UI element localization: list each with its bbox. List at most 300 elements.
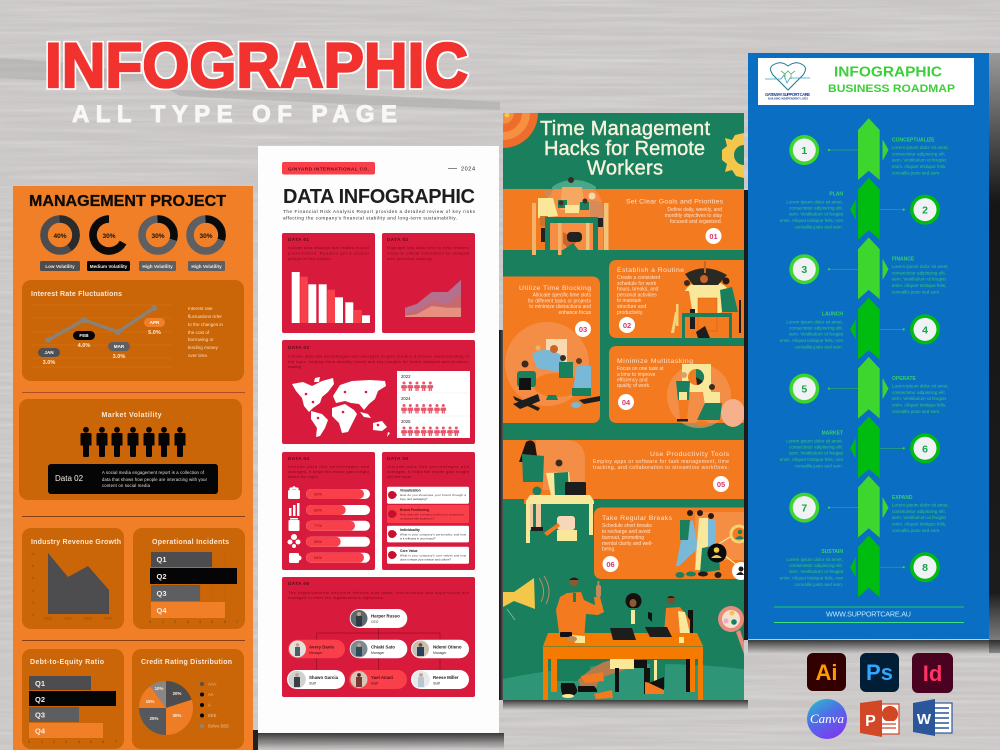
bar chart: 0 (149, 620, 151, 624)
panel: data infographic (white) (258, 146, 499, 733)
card: utilize time blocking (503, 276, 600, 423)
step 5: operate: consectetur adipiscing elit. (892, 390, 946, 395)
card: utilize time blocking: for different tasks or projects (528, 298, 591, 304)
heading: time management hacks: Hacks for Remote (544, 138, 705, 160)
panel: industry revenue growth: 10 (31, 552, 35, 556)
org node: staff reese: Reese Miller (433, 675, 459, 680)
magnifier (718, 606, 744, 654)
badge: 05 (713, 476, 729, 492)
step 8: sustain: 8 (922, 562, 928, 574)
progress bars (306, 489, 370, 563)
org node: staff yael: Yael Amari (371, 675, 393, 680)
step 4: launch: consectetur adipiscing elit. (789, 325, 843, 330)
org node: ceo (350, 609, 407, 628)
step 7: expand: sem. Vestibulum ut feugiat (892, 515, 947, 520)
step 8: sustain: Lorem ipsum dolor sit amet, (786, 557, 843, 562)
panel: credit rating distribution (132, 649, 244, 749)
step 6: market: Lorem ipsum dolor sit amet, (786, 438, 843, 443)
legend: Below BBB (208, 724, 229, 728)
step 3: finance: 3 (801, 264, 807, 276)
year (448, 166, 475, 172)
badge: 04: 04 (622, 398, 631, 407)
panel: interest rate fluctuations: Interest Rate Fluctuations (31, 291, 122, 298)
card: data 06 org chart: DATA 06 (288, 581, 309, 587)
panel: industry revenue growth: 4 (32, 589, 34, 593)
card: data 03: making. (288, 364, 302, 369)
card: data 03: the topic, helping them identify trends and key insights for better analysis and decision- (288, 359, 470, 364)
step 8: sustain (780, 536, 940, 597)
callout: data 02: A social media engagement report is a collection of (102, 470, 205, 475)
header: INFOGRAPHIC (834, 64, 943, 80)
step 8: sustain: SUSTAIN (821, 549, 843, 555)
org node: manager avery: Avery Davis (309, 644, 335, 650)
illustration: team at table (532, 177, 608, 255)
card: data 05: DATA 05 (387, 456, 408, 462)
panel: debt-to-equity ratio: Debt-to-Equity Ratio (30, 659, 104, 666)
bar chart (28, 676, 117, 744)
bar chart: 4 (199, 620, 201, 624)
card: take regular breaks (594, 508, 750, 580)
list cards: is it reflected in your brand? (400, 536, 436, 540)
text: set clear goals: monthly objectives to stay (665, 213, 722, 219)
footer: website: WWW.SUPPORTCARE.AU (826, 610, 911, 618)
area chart (405, 280, 461, 317)
card: data 01: picture of the subject. (288, 256, 332, 261)
text: interest rate note: borrowing or (188, 337, 214, 342)
bar chart: 3 (65, 740, 67, 744)
bar chart: Q3 (156, 589, 167, 598)
card: take regular breaks: to recharge and avoid (602, 529, 651, 535)
donut charts row: 30% (151, 233, 165, 240)
bar chart: Q4 (156, 606, 167, 615)
card: data 02: and decision-making. (387, 256, 433, 261)
bar chart (149, 550, 238, 624)
step 1: conceptualize: Lorem ipsum dolor sit amet, (892, 145, 949, 150)
step 5: operate: 5 (801, 384, 807, 396)
logo: BUILDING INDEPENDENT LIVES (768, 96, 808, 100)
panel: industry revenue growth: 2024 (104, 616, 112, 620)
icon: powerpoint: P (865, 713, 876, 730)
card: data 05: Include data like percentages and (387, 464, 469, 469)
step 3: finance (789, 238, 949, 299)
list cards: Brand Positioning (400, 508, 429, 512)
card: take regular breaks: burnout, promoting (602, 535, 644, 541)
pictogram by year (397, 371, 470, 438)
step 8: sustain: consectetur adipiscing elit. (789, 563, 843, 568)
bar chart: Q2 (35, 695, 45, 704)
card: establish a routine (609, 260, 744, 338)
band: set clear goals (503, 177, 744, 255)
seated man (664, 596, 693, 634)
band: use productivity tools: Employ apps or software for task management, time (593, 459, 729, 465)
company pill (282, 162, 375, 174)
laptops and papers on desk (560, 627, 684, 643)
bar chart: 1 (41, 740, 43, 744)
callout: data 02: content on social media (102, 483, 151, 488)
text: set clear goals (626, 198, 724, 225)
card: data 03 (282, 340, 475, 444)
pictogram by year: 2024 (401, 396, 411, 401)
card: minimize multitasking: quality of work. (617, 383, 650, 389)
desk (543, 633, 703, 700)
pie chart: 30% (173, 713, 181, 718)
org node: ceo: Harper Russo (371, 614, 400, 618)
card: take regular breaks: being. (602, 546, 616, 552)
step 4: launch: LAUNCH (822, 311, 843, 317)
legend: AAA (208, 682, 217, 686)
pictogram by year: 2025 (401, 419, 411, 424)
card: data 04 (282, 452, 375, 570)
panel: industry revenue growth: Industry Revenue Growth (31, 539, 121, 546)
icon: indesign (912, 653, 953, 693)
bar chart: 6 (102, 740, 104, 744)
pie chart: 10% (155, 686, 163, 691)
list cards: logo, and packaging? (400, 497, 428, 501)
card: minimize multitasking: a time to improve (617, 372, 656, 378)
badge: 06: 06 (606, 560, 615, 569)
step 5: operate: OPERATE (892, 376, 916, 382)
step 1: conceptualize: consectetur adipiscing elit. (892, 152, 946, 156)
band: use productivity tools: tracking, and collaboration to streamline workflows. (593, 465, 729, 471)
card: data 03: DATA 03 (288, 345, 309, 351)
card: data 01: presentation. Readers get a clearer (288, 250, 370, 256)
illustration: team meeting (505, 322, 600, 411)
pie chart: 25% (150, 716, 158, 721)
card: take regular breaks: Schedule short breaks (602, 523, 652, 529)
org node: manager ndemi (411, 640, 469, 658)
logo (765, 63, 810, 100)
card: data 02: Highlight key data here to help readers (387, 245, 469, 250)
bar chart: Q1 (35, 679, 45, 688)
card: data 06 org chart: The organizational structure defines how tasks, coordination and supervision are (288, 590, 470, 595)
org node: manager ndemi: Ndemi Otieno (433, 644, 462, 650)
step 2: plan (780, 178, 940, 240)
card: data 01: DATA 01 (288, 237, 309, 243)
card: data 03: Include data like percentages and averages to give readers a clearer understanding of (288, 354, 470, 358)
text: interest rate note: fluctuations refer (188, 314, 222, 319)
list cards: Visualization (400, 488, 421, 492)
text: set clear goals: Set Clear Goals and Priorities (626, 198, 724, 206)
org node: staff reese (411, 670, 469, 689)
list cards: How do you showcase your brand through a (400, 493, 466, 497)
panel: market volatility: Market Volatility (102, 412, 162, 419)
panel: industry revenue growth: 2 (32, 601, 34, 605)
panel: industry revenue growth: 8 (32, 564, 34, 568)
panel: operational incidents: Operational Incidents (152, 539, 229, 546)
icon: canva: Canva (810, 711, 844, 726)
card: data 05 (382, 452, 475, 570)
volatility pills: Medium Volatility (90, 264, 128, 269)
bar chart (292, 272, 370, 323)
card: establish a routine: structure and (617, 304, 646, 310)
text: interest rate note: lending money (188, 345, 219, 350)
step 5: operate: Lorem ipsum dolor sit amet, (892, 384, 949, 389)
panel: industry revenue growth: 2023 (84, 616, 92, 620)
illustration: coworkers at monitor (519, 440, 594, 543)
org node: manager chiaki: Manager (371, 651, 385, 655)
title: INFOGRAPHIC (45, 31, 468, 101)
step 2: plan: consectetur adipiscing elit. (789, 206, 843, 211)
step 3: finance: consectetur adipiscing elit. (892, 271, 946, 276)
card: establish a routine: productivity. (617, 310, 643, 316)
card: data 01 (282, 233, 375, 333)
callout: data 02: data that shows how people are interacting with your (102, 477, 208, 482)
header (758, 58, 974, 105)
step 6: market: sem. Vestibulum ut feugiat (789, 450, 844, 455)
icon: powerpoint (860, 700, 899, 737)
card: data 04: Include data like percentages and (288, 464, 369, 469)
text: interest rate note: to the changes in (188, 322, 223, 327)
illustration: presenter with chart (667, 364, 745, 428)
step 6: market: consectetur adipiscing elit. (789, 444, 843, 449)
callout: data 02 (48, 464, 218, 494)
pictogram by year: 2022 (401, 374, 411, 379)
card: establish a routine: schedule for work (617, 281, 657, 287)
step 4: launch: Lorem ipsum dolor sit amet, (786, 319, 843, 324)
step 7: expand: Lorem ipsum dolor sit amet, (892, 503, 949, 508)
volatility pills (40, 261, 225, 271)
step 2: plan: 2 (922, 205, 928, 217)
step 5: operate (789, 357, 949, 419)
progress icons (288, 486, 302, 563)
panel: industry revenue growth: 0 (32, 613, 34, 617)
band: use productivity tools: Use Productivity Tools (650, 451, 730, 458)
step 3: finance: Lorem ipsum dolor sit amet, (892, 264, 949, 269)
card: utilize time blocking: Allocate specific time slots (533, 292, 591, 298)
seated woman (626, 593, 652, 624)
bar chart: Q2 (156, 572, 167, 581)
bar chart: Q3 (35, 710, 45, 720)
decoration: yellow gear (722, 133, 744, 178)
panel: industry revenue growth (22, 528, 124, 629)
legend: A (208, 702, 211, 708)
heading: management project: MANAGEMENT PROJECT (29, 193, 226, 210)
pie chart: 15% (146, 699, 154, 704)
heading: time management hacks: Time Management (540, 118, 710, 140)
step 6: market: 6 (922, 443, 928, 455)
bar chart: Q1 (156, 555, 167, 564)
card: utilize time blocking: enhance focus (558, 310, 591, 316)
card: data 05: averages. It helps the reader gain insight (387, 469, 470, 474)
org node: manager chiaki: Chiaki Sato (371, 644, 395, 650)
donut charts row: 40% (53, 233, 67, 240)
step 5: operate: sem. Vestibulum ut feugiat (892, 396, 947, 401)
step 2: plan: convallis justo sed sem. (794, 225, 843, 230)
org node: staff shawn: Shawn Garcia (309, 675, 339, 680)
heading: time management hacks: Workers (587, 158, 663, 180)
step 3: finance: enim. Aliquet tristique felis, (892, 283, 946, 288)
icon: photoshop (860, 653, 899, 692)
legs under the table (557, 659, 691, 699)
step 3: finance: convallis justo sed sem. (892, 290, 941, 295)
org node: staff shawn (287, 670, 345, 689)
bar chart: 7 (115, 740, 117, 744)
bar chart: 5 (90, 740, 92, 744)
panel: debt-to-equity ratio (22, 649, 124, 749)
bar chart: Q4 (35, 726, 46, 736)
step 1: conceptualize: sem. Vestibulum ut feugiat (892, 158, 947, 162)
card: data 01: Include data displays that relates to your (288, 245, 370, 250)
panel: interest rate fluctuations: FEB (79, 333, 89, 338)
badge: 06 (602, 556, 618, 572)
panel: interest rate fluctuations: 3.0% (113, 354, 125, 360)
list cards: Individuality (400, 528, 420, 532)
bar chart: 2 (174, 620, 176, 624)
step 8: sustain: convallis justo sed sem. (794, 582, 843, 587)
list cards: compared with audiences? (400, 516, 435, 520)
text: set clear goals: Define daily, weekly, and (667, 207, 722, 213)
panel: business roadmap (blue) (748, 53, 989, 639)
panel: time management hacks (green) (503, 112, 750, 700)
org node: manager avery (288, 640, 345, 658)
badge: 01: 01 (709, 232, 718, 241)
step 5: operate: convallis justo sed sem. (892, 409, 941, 414)
text: interest rate note: Interest rate (188, 306, 213, 311)
panel: interest rate fluctuations: APR (150, 320, 160, 325)
step 7: expand (789, 476, 949, 538)
step 4: launch: sem. Vestibulum ut feugiat (789, 331, 844, 336)
panel: industry revenue growth: 6 (32, 576, 34, 580)
list cards: Core Value (400, 549, 418, 553)
step 6: market: convallis justo sed sem. (794, 463, 843, 468)
card: take regular breaks: mental clarity and well- (602, 541, 653, 547)
panel: market volatility (19, 399, 242, 500)
badge: 05: 05 (717, 480, 725, 489)
band: use productivity tools (503, 440, 744, 543)
badge: 01 (706, 228, 722, 244)
company pill: GINYARD INTERNATIONAL CO. (288, 166, 369, 172)
bar chart: 2 (53, 740, 55, 744)
panel: industry revenue growth: 2021 (44, 616, 52, 620)
card: minimize multitasking (609, 346, 745, 428)
heading: data infographic: DATA INFOGRAPHIC (283, 186, 475, 208)
card: data 04: averages. It helps the reader gain insight (288, 469, 370, 474)
step 6: market: enim. Aliquet tristique felis, non (780, 457, 843, 462)
illustration: bottom meeting scene (503, 576, 744, 700)
text: set clear goals: focused and organized. (670, 219, 722, 225)
step 3: finance: sem. Vestibulum ut feugiat (892, 277, 947, 282)
volatility pills: High Volatility (191, 264, 222, 269)
year: 2024 (461, 166, 475, 172)
badge: 03 (575, 321, 591, 337)
icon: canva (807, 699, 847, 739)
bar chart: 4 (78, 740, 80, 744)
card: minimize multitasking: efficiency and (617, 378, 648, 384)
icon: photoshop: Ps (866, 660, 893, 685)
card: data 02 (382, 233, 475, 333)
decoration: orange rings (503, 112, 538, 148)
card: data 06 org chart: managed to meet the organization's objectives. (288, 595, 384, 600)
step 4: launch: 4 (922, 324, 928, 336)
step 6: market: MARKET (822, 430, 843, 436)
org node: staff reese: Staff (433, 682, 440, 686)
card: establish a routine: Create a consistent (617, 275, 661, 281)
people pictogram (80, 427, 186, 457)
pie chart: 20% (173, 691, 181, 696)
text: interest rate note: the cost of (188, 330, 210, 335)
panel: industry revenue growth: 2022 (64, 616, 72, 620)
area chart (48, 553, 109, 614)
list cards: How does the company position to consumers (400, 512, 465, 516)
panel: operational incidents (133, 528, 245, 629)
card: establish a routine: hours, breaks, and (617, 286, 659, 292)
step 2: plan: enim. Aliquet tristique felis, non (780, 218, 843, 223)
legend: AA (208, 692, 214, 697)
card: data 06 org chart (282, 577, 475, 697)
bar chart: 7 (236, 620, 238, 624)
card: utilize time blocking: Utilize Time Blocking (519, 285, 591, 292)
badge: 02: 02 (623, 321, 631, 330)
callout: data 02: Data 02 (55, 474, 84, 483)
org node: ceo: CEO (371, 620, 379, 624)
step 7: expand: convallis justo sed sem. (892, 528, 941, 533)
heading: time management hacks (540, 118, 710, 180)
org node: manager ndemi: Manager (433, 651, 447, 655)
intro text (283, 209, 476, 220)
panel: interest rate fluctuations: 3.0% (43, 360, 55, 366)
world map (292, 377, 390, 437)
org node: manager chiaki (350, 640, 407, 658)
icon: word: W (917, 711, 932, 728)
card: take regular breaks: Take Regular Breaks (602, 515, 673, 522)
card: establish a routine: Establish a Routine (617, 267, 684, 274)
volatility pills: Low Volatility (45, 264, 75, 269)
panel: interest rate fluctuations (22, 280, 244, 381)
card: data 04: about the topic. (288, 474, 319, 479)
org node: staff yael (349, 670, 407, 689)
progress bars: 55% (314, 539, 322, 544)
badge: 03: 03 (579, 325, 587, 334)
step 5: operate: enim. Aliquet tristique felis, (892, 403, 946, 408)
step 1: conceptualize: enim. Aliquet tristique felis, (892, 164, 946, 169)
legend (200, 682, 229, 728)
megaphone (503, 576, 549, 620)
list cards: does it shape your mission and culture? (400, 558, 451, 562)
step 1: conceptualize: 1 (801, 145, 807, 157)
legend: BBB (208, 713, 217, 718)
step 2: plan: Lorem ipsum dolor sit amet, (786, 200, 843, 205)
org node: manager avery: Manager (309, 651, 323, 655)
donut charts row (44, 213, 222, 257)
panel: interest rate fluctuations: MAR (114, 344, 125, 349)
icon: word (913, 699, 952, 736)
panel: management project (orange) (13, 186, 253, 750)
card: minimize multitasking: Focus on one task at (617, 366, 664, 372)
card: data 02: focus on critical information for analysis (387, 250, 469, 256)
panel: interest rate fluctuations: JAN (44, 350, 54, 355)
progress bars: 90% (314, 492, 322, 496)
bar chart: 6 (224, 620, 226, 624)
step 4: launch (780, 298, 940, 359)
panel: interest rate fluctuations: 5.0% (148, 330, 161, 336)
volatility pills: High Volatility (142, 264, 173, 269)
header: BUSINESS ROADMAP (828, 83, 955, 95)
subtitle: ALL TYPE OF PAGE (72, 101, 397, 128)
bar chart: 5 (211, 620, 213, 624)
step 7: expand: enim. Aliquet tristique felis, (892, 522, 946, 527)
step 1: conceptualize: convallis justo sed sem. (892, 170, 941, 176)
progress bars: 60% (314, 508, 322, 512)
card: establish a routine: personal activities (617, 292, 657, 298)
step 1: conceptualize: CONCEPTUALIZE (892, 138, 935, 144)
bar chart: 3 (187, 620, 189, 624)
step 2: plan: sem. Vestibulum ut feugiat (789, 212, 844, 217)
card: utilize time blocking: to minimize distractions and (529, 304, 591, 310)
presenter (556, 578, 604, 633)
step 2: plan: PLAN (829, 192, 843, 198)
text: interest rate note: over time. (188, 353, 208, 358)
card: data 02: DATA 02 (387, 237, 408, 243)
